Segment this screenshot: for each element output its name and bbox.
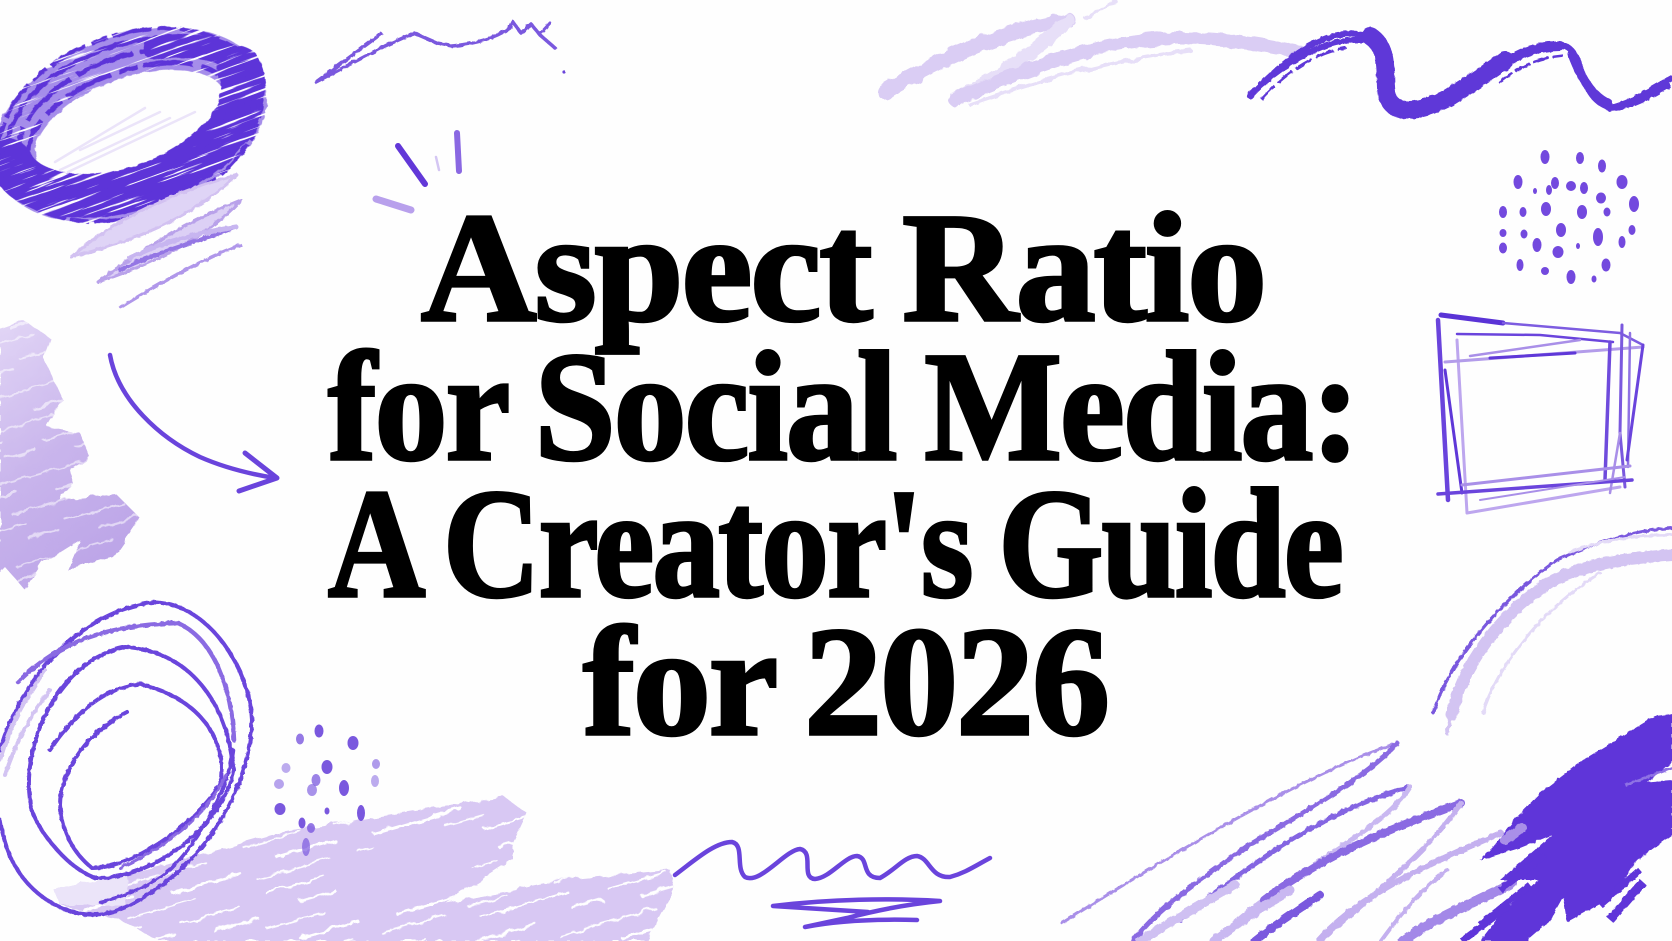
scribble: light wash left edge [0,320,140,590]
title [328,181,1358,768]
faint hatching inside ring [55,108,195,172]
scribble: large light brush bottom left [54,797,674,941]
icon: dot cluster top right [1499,150,1639,284]
scribble: light brush strokes top [885,0,1300,104]
scribble: spiral circles bottom left [0,602,252,915]
title: for Social Media: [328,320,1358,493]
scribble: wavy line bottom centre [675,842,990,927]
scribble: curved arcs right [1433,528,1672,733]
icon: burst rays [376,133,459,210]
scribble: purple wave top right [1250,34,1672,113]
title: Aspect Ratio [421,181,1265,354]
scribble: light hatching under ring [71,175,241,307]
arrow: curved purple arrow [110,355,277,491]
icon: dot cluster bottom left [274,724,380,856]
scribble: sketched rectangle right [1438,315,1643,513]
title: A Creator's Guide [328,457,1342,630]
scribble: solid purple brush corner [1462,714,1672,941]
scribble: thick ring top left [0,0,289,256]
scribble: thin squiggle top [316,22,566,82]
title: for 2026 [583,595,1108,768]
scribble: diagonal hatch strokes bottom right [1062,743,1512,941]
